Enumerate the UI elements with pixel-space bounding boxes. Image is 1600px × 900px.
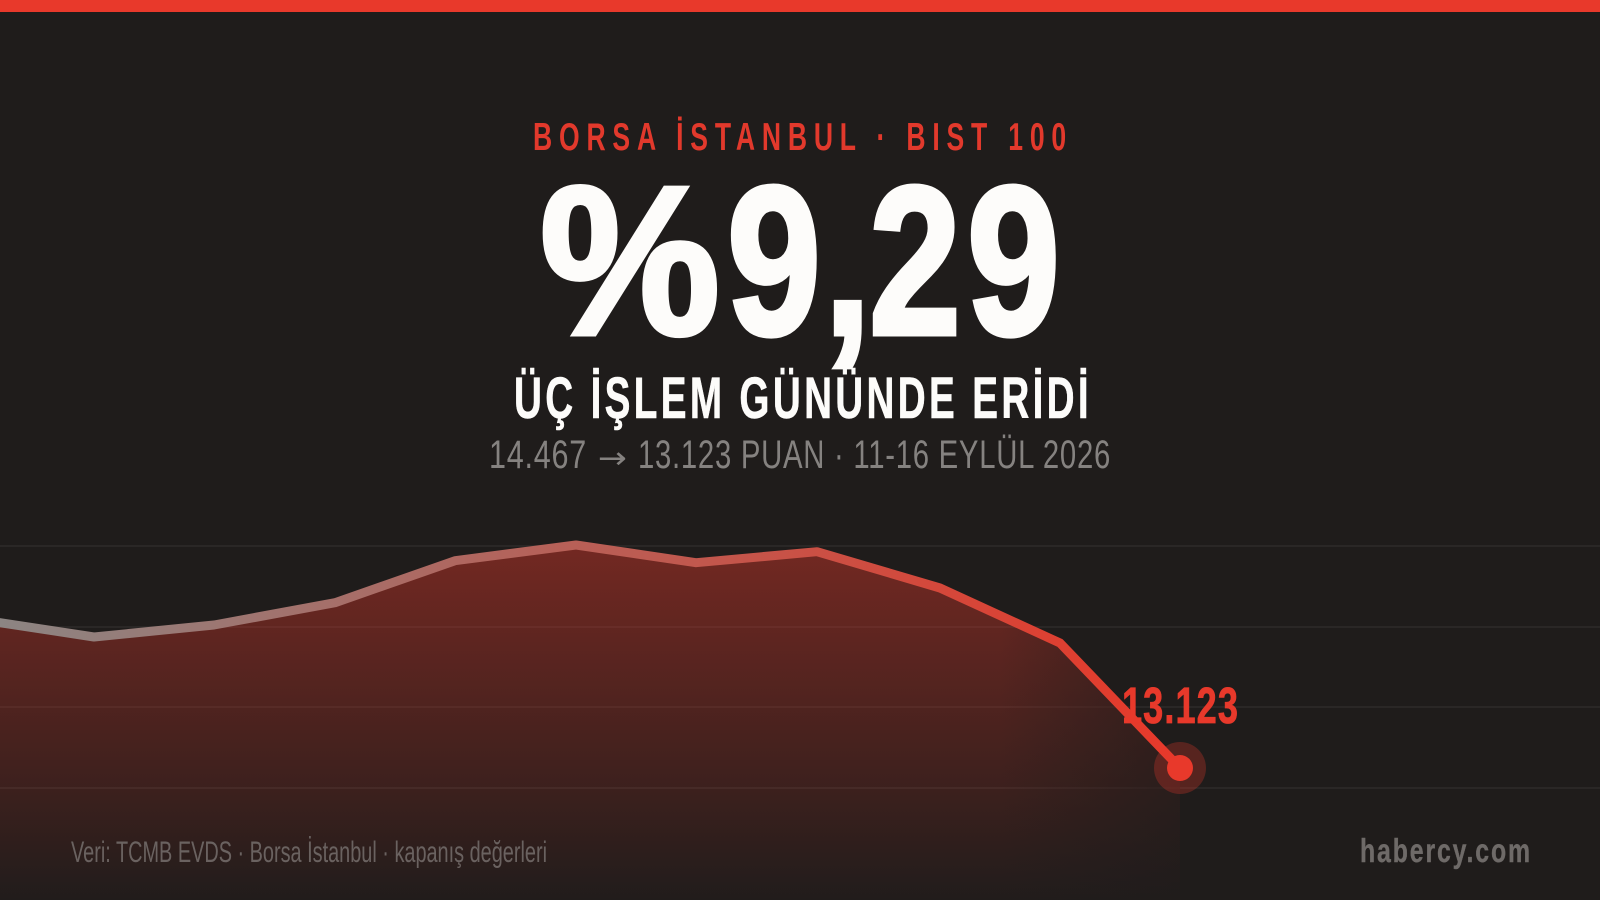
hero figure: 2 bbox=[869, 142, 961, 379]
chart area fill bbox=[0, 545, 1180, 900]
end point marker bbox=[1154, 742, 1206, 794]
end value label: 13.123 bbox=[1122, 677, 1239, 734]
hero figure bbox=[540, 142, 1060, 379]
hero figure: 9 bbox=[727, 142, 821, 379]
chart line bbox=[0, 545, 1180, 768]
detail line: → bbox=[598, 441, 627, 476]
source note: Veri: TCMB EVDS · Borsa İstanbul · kapanış değerleri bbox=[71, 836, 547, 869]
area line chart: BIST 100 closing values bbox=[0, 545, 1239, 900]
brand: habercy.com bbox=[1360, 832, 1532, 869]
detail line: 13.123 PUAN · 11-16 EYLÜL 2026 bbox=[638, 433, 1111, 477]
subtitle: ÜÇ İŞLEM GÜNÜNDE ERİDİ bbox=[514, 366, 1092, 431]
hero figure: , bbox=[824, 142, 871, 379]
top accent bar bbox=[0, 0, 1600, 12]
hero figure: 9 bbox=[967, 142, 1060, 379]
detail line: 14.467 bbox=[489, 433, 587, 477]
detail line bbox=[489, 433, 1111, 477]
hero figure: % bbox=[540, 142, 720, 379]
eyebrow heading: BORSA İSTANBUL · BIST 100 bbox=[533, 116, 1073, 159]
